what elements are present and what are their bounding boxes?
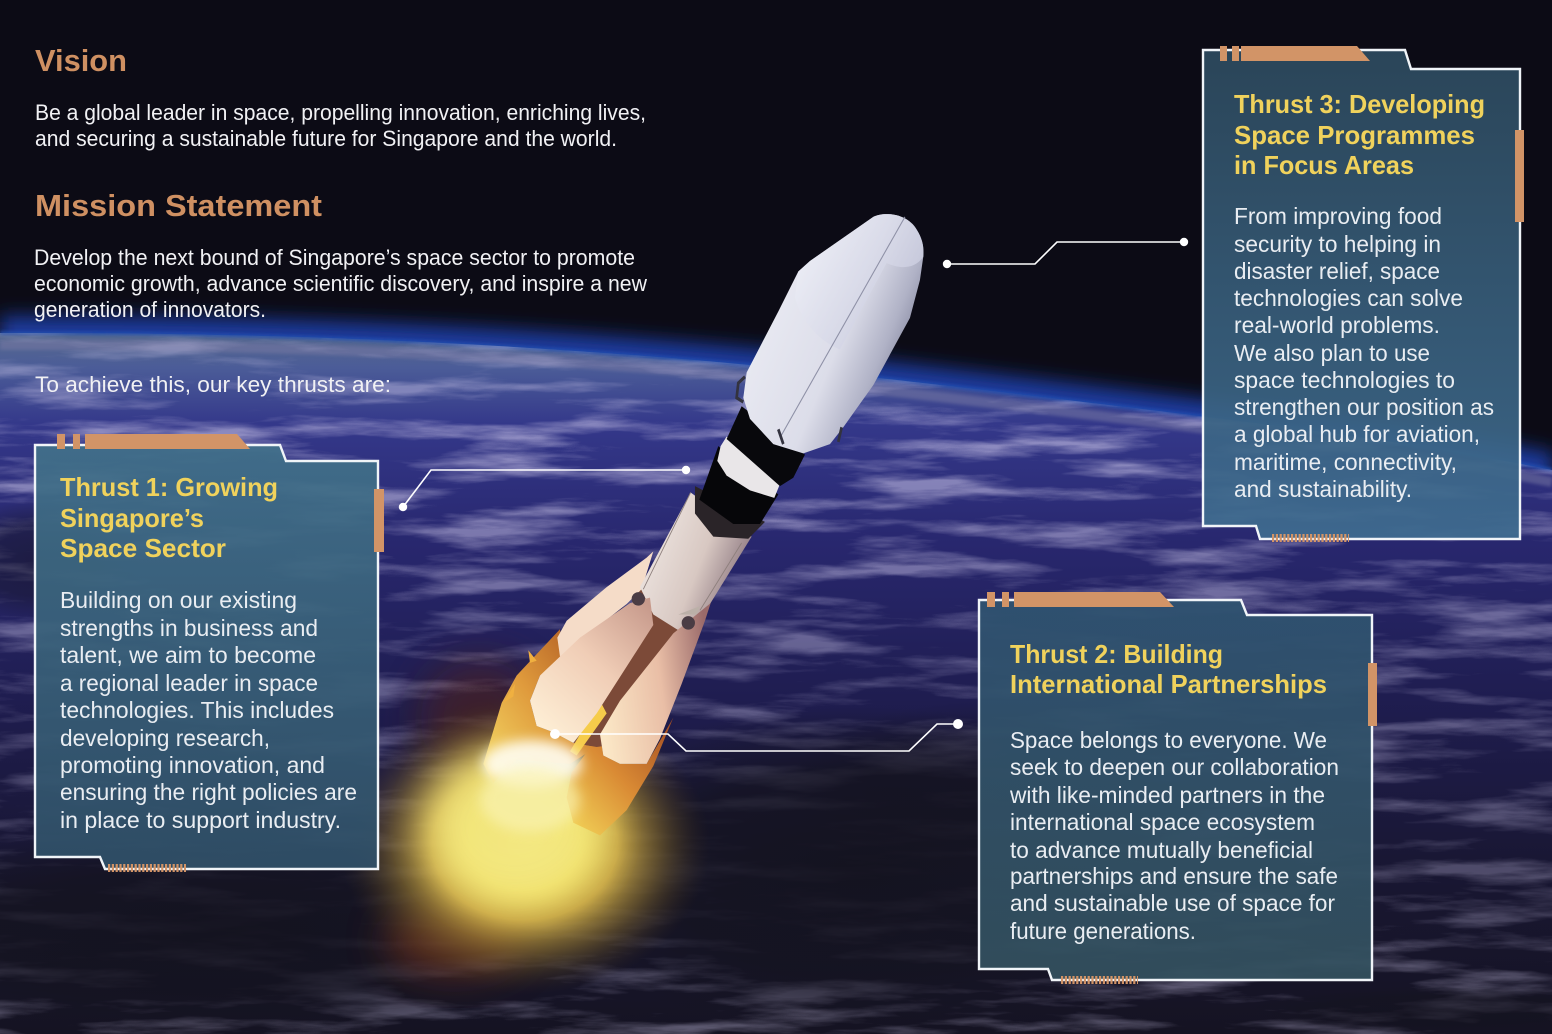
thrust 2 body: seek to deepen our collaboration [1010, 754, 1339, 780]
thrust 2 body: to advance mutually beneficial [1010, 837, 1313, 863]
heading: Mission Statement: Mission Statement [35, 188, 322, 223]
vision text: Be a global leader in space, propelling innovation, enriching lives, [35, 100, 646, 125]
black band lower [699, 446, 778, 524]
thrust 2 heading [1010, 639, 1327, 699]
thrust 1 body: strengths in business and [60, 615, 318, 641]
far left booster [557, 551, 653, 657]
core stage [640, 492, 752, 633]
payload fairing [743, 214, 923, 453]
panel: Thrust 2 [979, 592, 1377, 980]
rocket [483, 214, 923, 835]
thrust 1 heading: Singapore’s [60, 503, 204, 533]
core seams [643, 492, 742, 610]
connector: Thrust 2 [550, 719, 963, 751]
side bar [1368, 663, 1377, 726]
thrust 3 body: We also plan to use [1234, 340, 1430, 366]
background: space and earth [0, 303, 1552, 1034]
thrust 1 body: technologies. This includes [60, 697, 334, 723]
side bar [1515, 130, 1524, 222]
thrust 2 body: international space ecosystem [1010, 809, 1315, 835]
panel: Thrust 1 [35, 434, 384, 869]
side bar [374, 489, 384, 552]
thrust 3 body: and sustainability. [1234, 476, 1412, 502]
mission text [34, 245, 647, 322]
flame overlay on booster base [480, 740, 582, 832]
connector: Thrust 3 [943, 238, 1188, 268]
fin [503, 650, 537, 703]
mission text: generation of innovators. [34, 297, 266, 322]
booster backing [573, 587, 711, 747]
left engine skirt [483, 629, 597, 783]
thrust 1 body: developing research, [60, 725, 270, 751]
thrust 2 body: and sustainable use of space for [1010, 890, 1335, 916]
comb [1272, 534, 1349, 542]
thrust 2 body: with like-minded partners in the [1009, 782, 1325, 808]
black band upper [727, 406, 805, 486]
right booster [600, 603, 711, 764]
lower interstage [695, 486, 765, 539]
panel tab [987, 592, 1174, 607]
heading: Vision: Vision [35, 43, 127, 78]
thrust 3 body [1234, 203, 1494, 502]
thrust 3 body: strengthen our position as [1234, 394, 1494, 420]
thrust 3 body: real-world problems. [1234, 312, 1440, 338]
thrust 1 heading: Space Sector [60, 533, 226, 563]
comb [1061, 976, 1138, 984]
comb [108, 864, 186, 872]
panel: Thrust 3 [1203, 46, 1524, 539]
thrust 1 body: a regional leader in space [60, 670, 318, 696]
thrust 3 body: maritime, connectivity, [1234, 449, 1457, 475]
thrust 1 body: promoting innovation, and [60, 752, 325, 778]
thrust 2 heading: International Partnerships [1010, 669, 1327, 699]
struts [632, 592, 645, 606]
fairing seam [780, 217, 905, 438]
thrust 2 heading: Thrust 2: Building [1010, 639, 1223, 669]
thrust 3 heading [1234, 89, 1485, 180]
vision text [35, 100, 646, 151]
central exhaust gap [570, 701, 607, 755]
thrust 3 body: technologies can solve [1234, 285, 1463, 311]
mission text: economic growth, advance scientific discovery, and inspire a new [34, 271, 647, 296]
thrust 2 body: partnerships and ensure the safe [1010, 863, 1338, 889]
thrust 1 body: ensuring the right policies are [60, 779, 357, 805]
thrust 3 body: From improving food [1234, 203, 1442, 229]
thrust 3 heading: in Focus Areas [1234, 150, 1414, 180]
white stripe [717, 436, 780, 498]
thrust 1 heading [60, 472, 278, 563]
thrust 1 body: talent, we aim to become [60, 642, 316, 668]
thrust 1 body [60, 587, 357, 833]
key thrusts intro: To achieve this, our key thrusts are: [35, 372, 391, 397]
thrust 2 body: Space belongs to everyone. We [1010, 727, 1327, 753]
panel tab [57, 434, 250, 449]
thrust 3 body: disaster relief, space [1234, 258, 1440, 284]
vision text: and securing a sustainable future for Singapore and the world. [35, 126, 617, 151]
thrust 2 body [1009, 727, 1339, 944]
right engine skirt [567, 718, 673, 835]
thrust 1 body: in place to support industry. [60, 807, 341, 833]
fairing shoulder [795, 214, 923, 349]
fairing base clamps [737, 377, 842, 444]
middle booster [530, 598, 653, 743]
panel tab [1220, 46, 1370, 61]
thrust 2 body: future generations. [1010, 918, 1196, 944]
thrust 3 body: a global hub for aviation, [1234, 421, 1480, 447]
mission text: Develop the next bound of Singapore’s space sector to promote [34, 245, 635, 270]
thrust 3 body: space technologies to [1234, 367, 1455, 393]
connector: Thrust 1 [399, 466, 690, 511]
thrust 3 body: security to helping in [1234, 231, 1441, 257]
thrust 3 heading: Thrust 3: Developing [1234, 89, 1485, 119]
thrust 1 heading: Thrust 1: Growing [60, 472, 278, 502]
flame glow [340, 660, 710, 995]
thrust 1 body: Building on our existing [60, 587, 297, 613]
thrust 3 heading: Space Programmes [1234, 120, 1475, 150]
